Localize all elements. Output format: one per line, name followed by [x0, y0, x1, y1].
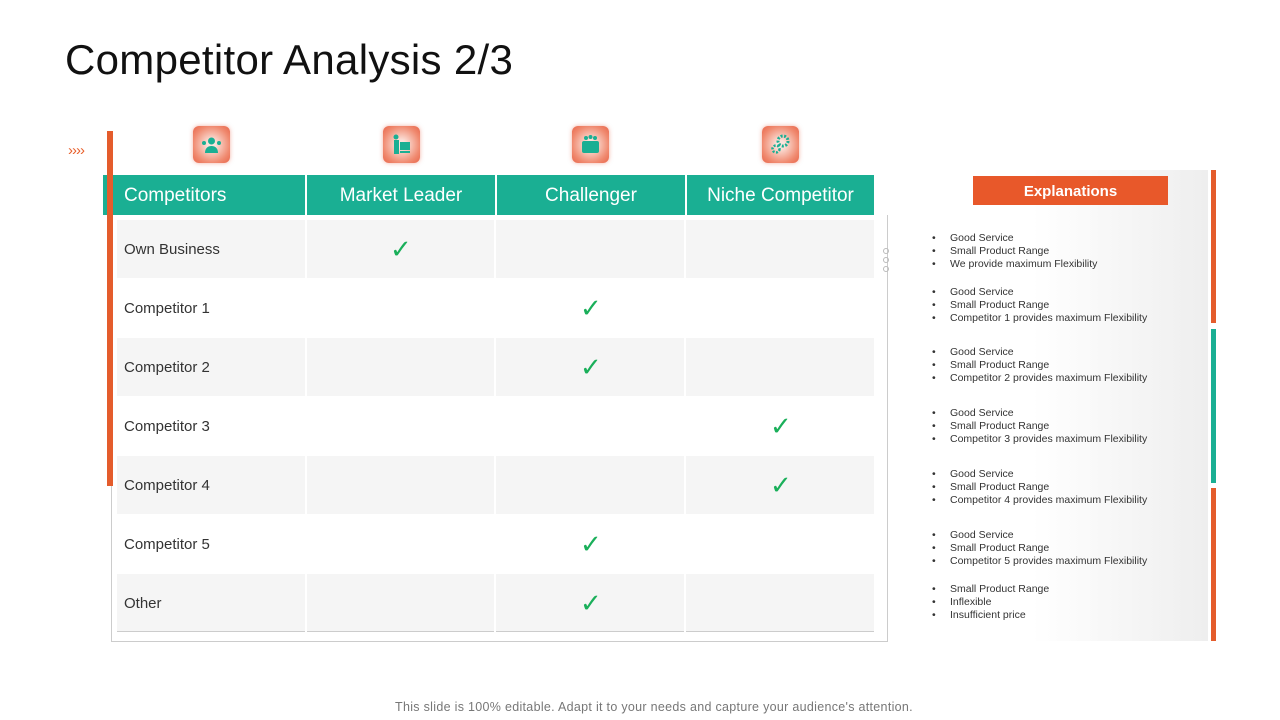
table rows: Competitor 5 [124, 536, 210, 553]
table rows: Competitor 3 [124, 418, 210, 435]
explanation: competitor 3: Small Product Range [950, 420, 1049, 432]
header row: Challenger [545, 185, 637, 206]
table rows: Own Business [124, 241, 220, 258]
explanation: competitor 3 [932, 407, 1148, 445]
explanation: own business: Small Product Range [950, 245, 1049, 257]
explanation: competitor 3: Good Service [950, 407, 1014, 419]
explanations panel [915, 170, 1208, 641]
explanation: competitor 1: Good Service [950, 286, 1014, 298]
explanation: competitor 5: Competitor 5 provides maximum Flexibility [950, 555, 1147, 567]
explanation: competitor 5: Good Service [950, 529, 1014, 541]
icon: gears [762, 126, 799, 163]
explanations heading [973, 176, 1168, 205]
table rows [117, 220, 874, 632]
explanation: other: Small Product Range [950, 583, 1049, 595]
table rows: ✓ [580, 294, 602, 324]
header row: Competitors [124, 185, 226, 206]
icon: team [193, 126, 230, 163]
table rows: ✓ [580, 530, 602, 560]
explanation: competitor 1: Competitor 1 provides maximum Flexibility [950, 312, 1147, 324]
explanations heading: Explanations [1024, 183, 1117, 200]
table rows: ✓ [580, 589, 602, 619]
explanation: competitor 2 [932, 346, 1148, 384]
header row: Market Leader [340, 185, 462, 206]
explanation: competitor 1: Small Product Range [950, 299, 1049, 311]
icon: group [572, 126, 609, 163]
arrows icon: ›››› [68, 142, 84, 159]
explanation: own business: Good Service [950, 232, 1014, 244]
table rows: ✓ [390, 235, 412, 265]
table rows: Competitor 2 [124, 359, 210, 376]
explanation: competitor 4: Good Service [950, 468, 1014, 480]
explanation: own business [932, 232, 1098, 270]
explanation: competitor 5: Small Product Range [950, 542, 1049, 554]
explanation: competitor 1 [932, 286, 1148, 324]
explanation: other: Inflexible [950, 596, 991, 608]
orange vertical bar [107, 131, 113, 486]
table rows: Other [124, 595, 162, 612]
explanation: competitor 2: Good Service [950, 346, 1014, 358]
table rows: Competitor 1 [124, 300, 210, 317]
footer: This slide is 100% editable. Adapt it to your needs and capture your audience's attention. [395, 700, 913, 714]
explanation: competitor 4: Small Product Range [950, 481, 1049, 493]
table rows: ✓ [770, 412, 792, 442]
explanation: competitor 3: Competitor 3 provides maximum Flexibility [950, 433, 1147, 445]
table outline [111, 215, 888, 642]
header row: Niche Competitor [707, 185, 854, 206]
explanation: competitor 5 [932, 529, 1148, 567]
table rows: ✓ [580, 353, 602, 383]
explanation: competitor 2: Competitor 2 provides maximum Flexibility [950, 372, 1147, 384]
explanation: competitor 4: Competitor 4 provides maximum Flexibility [950, 494, 1147, 506]
explanation: other: Insufficient price [950, 609, 1026, 621]
header row [103, 175, 874, 215]
table rows: Competitor 4 [124, 477, 210, 494]
title: Competitor Analysis 2/3 [65, 36, 513, 83]
explanation: own business: We provide maximum Flexibility [950, 258, 1097, 270]
icon: presenter [383, 126, 420, 163]
side bars [1211, 170, 1216, 641]
connector circles [883, 248, 889, 272]
table rows: ✓ [770, 471, 792, 501]
explanation: other [932, 583, 1049, 621]
explanation: competitor 2: Small Product Range [950, 359, 1049, 371]
explanation: competitor 4 [932, 468, 1148, 506]
